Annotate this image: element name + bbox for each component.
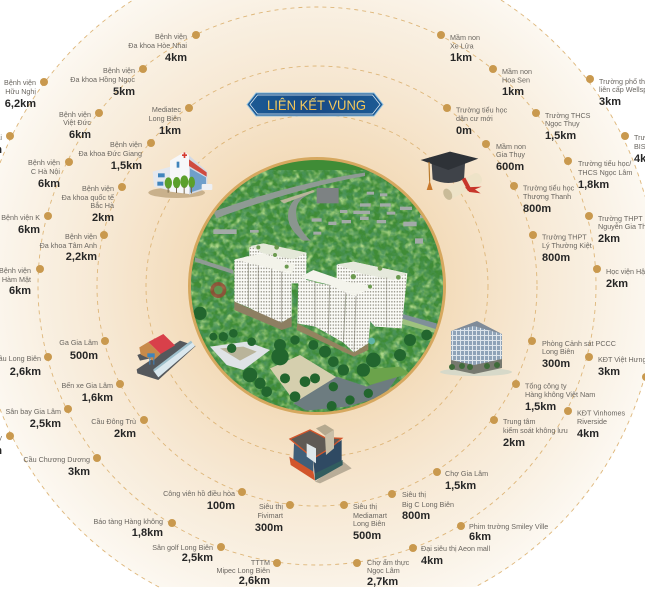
location: Công viên hồ điều hòa: 100m (207, 500, 235, 512)
location: KĐT Việt Hưng (585, 353, 645, 378)
icon: shop building (289, 424, 352, 483)
location: TTTM Mipec Long Biên (216, 558, 281, 587)
location: Đại siêu thị Aeon mall: 4km (421, 555, 443, 567)
location: Đại siêu thị Aeon mall: Đại siêu thị Aeon mall (421, 544, 491, 553)
location: Bệnh viện C Hà Nội (28, 158, 73, 190)
icon: office building (440, 321, 512, 376)
location: Siêu thị Mediamart Long Biên: 500m (353, 530, 381, 542)
location: Bệnh viện Việt Đức: Việt Đức (63, 118, 91, 127)
location: Sân golf Long Biên (152, 543, 225, 564)
location: Tổng công ty Hàng không Việt Nam: 1,5km (525, 401, 556, 413)
location: Bệnh viện Răng Hàm Mặt: 6km (9, 285, 31, 297)
icon: hospital (148, 152, 212, 198)
location: Sân bay Gia Lâm (5, 405, 72, 430)
location: Trường tiểu học dân cư mới: 0m (456, 125, 472, 137)
location: Sân golf Long Biên: Sân golf Long Biên (152, 543, 213, 552)
location: Bệnh viện Đa khoa Đức Giang: Đa khoa Đức Giang (78, 149, 142, 158)
location: Bệnh viện Đa khoa Đức Giang: Bệnh viện (110, 140, 142, 149)
location: Bệnh viện Đa khoa Hồng Ngọc: Đa khoa Hồng Ngọc (70, 75, 135, 84)
location: Phim trường Smiley Ville (457, 522, 548, 543)
location: Trung tâm kiểm soát không lưu: kiểm soát không lưu (503, 426, 568, 435)
location: Phòng Cảnh sát PCCC Long Biên: Phòng Cảnh sát PCCC (542, 339, 616, 348)
towers back right (337, 262, 407, 328)
location: Trường THPT Lý Thường Kiệt: Lý Thường Kiệt (542, 241, 592, 250)
towers front right (297, 278, 315, 327)
location: Bệnh viện Việt Đức: Bệnh viện (59, 110, 91, 119)
location: Trường tiểu học/THCS Ngọc Lâm (564, 157, 632, 191)
location: Trường tiểu học dân cư mới (443, 104, 508, 137)
location: Trường THPT Nguyễn Gia Thiều (585, 212, 645, 245)
towers front left (234, 256, 248, 307)
location: Trung tâm kiểm soát không lưu (490, 416, 568, 449)
location: Báo tàng Hàng không (93, 517, 176, 539)
location: Phòng Cảnh sát PCCC Long Biên (528, 337, 616, 370)
location: clipped hospital at left edge (0, 132, 14, 156)
location: Trường tiểu học Thượng Thanh: 800m (523, 203, 551, 215)
location: KĐT Vinhomes Riverside: Riverside (577, 417, 607, 426)
location: Bệnh viện Đa khoa quốc tế Bắc Hà: Đa khoa quốc tế (62, 193, 114, 202)
location: Bến xe Gia Lâm (61, 380, 124, 404)
location: Trường THCS Ngọc Thụy: Trường THCS (545, 111, 591, 120)
location: Siêu thị Mediamart Long Biên: Mediamart (353, 511, 387, 520)
location: Bệnh viện C Hà Nội: Bệnh viện (28, 158, 60, 167)
location: Trung tâm kiểm soát không lưu: 2km (503, 437, 525, 449)
location: Trường tiểu học/THCS Ngọc Lâm: 1,8km (578, 179, 609, 191)
location: Bệnh viện Đa khoa quốc tế Bắc Hà (62, 183, 126, 224)
location: Công viên hồ điều hòa (163, 488, 246, 512)
location: Báo tàng Hàng không: 1,8km (132, 527, 163, 539)
location: Bệnh viện Đa khoa quốc tế Bắc Hà: Bắc Hà (90, 201, 114, 210)
lower grounds (210, 342, 270, 370)
location: Mầm non Gia Thụy: 600m (496, 161, 524, 173)
location: Siêu thị Fivimart: Fivimart (257, 511, 283, 520)
location: Bệnh viện Đa khoa Tâm Anh: Bệnh viện (65, 232, 97, 241)
location: Mầm non Gia Thụy: Mầm non (496, 142, 526, 151)
location: Bệnh viện Đa khoa Hòe Nhai: Bệnh viện (155, 32, 187, 41)
location: KĐT Vinhomes Riverside: 4km (577, 428, 599, 440)
location: Tổng công ty Hàng không Việt Nam (512, 380, 595, 413)
location: Sân bay Gia Lâm: Sân bay Gia Lâm (5, 407, 61, 416)
location: Trường tiểu học Thượng Thanh: Trường tiểu học (523, 184, 575, 192)
location: Chợ Gia Lâm: 1,5km (445, 480, 476, 492)
location: Siêu thị Fivimart: Siêu thị (259, 502, 283, 511)
location: TTTM Mipec Long Biên: 2,6km (239, 575, 270, 587)
location: KĐT Vinhomes Riverside: KĐT Vinhomes (577, 408, 625, 418)
location: Mầm non Xe Lửa: 1km (450, 52, 472, 64)
location: Tổng công ty Hàng không Việt Nam: Tổng công ty (525, 382, 567, 390)
location: Siêu thị Big C Long Biên (388, 490, 454, 522)
location: Siêu thị Big C Long Biên: 800m (402, 510, 430, 522)
location: Phòng Cảnh sát PCCC Long Biên: Long Biên (542, 347, 574, 356)
location: Bệnh viện K: 6km (18, 224, 40, 236)
location: Cầu Chương Dương: Cầu Chương Dương (23, 455, 90, 464)
location: clipped marker at right edge (642, 373, 645, 381)
location: Ga Gia Lâm: 500m (70, 350, 98, 362)
location: Cầu Long Biên: 2,6km (10, 366, 41, 378)
location: Học viện Hậu cần (593, 265, 645, 290)
location: Cầu Đông Trù: Cầu Đông Trù (91, 417, 136, 426)
location: Trường tiểu học Thượng Thanh (510, 182, 575, 215)
location: Bệnh viện Việt Đức (59, 109, 103, 141)
location: TTTM Mipec Long Biên: Mipec Long Biên (216, 566, 270, 575)
location: Bệnh viện Đa khoa Đức Giang: 1,5km (111, 160, 142, 172)
location: Chợ ẩm thực Ngọc Lâm: Ngọc Lâm (367, 566, 400, 575)
location: Trường tiểu học/THCS Ngọc Lâm: THCS Ngọc Lâm (578, 168, 632, 177)
location: Trường THPT Lý Thường Kiệt: Trường THPT (542, 232, 587, 242)
location: Siêu thị Fivimart (255, 501, 294, 534)
location: Ga Gia Lâm: Ga Gia Lâm (59, 338, 98, 347)
location: Trường THPT Lý Thường Kiệt (529, 231, 592, 264)
location: KĐT Việt Hưng: 3km (598, 366, 620, 378)
location: Trung tâm kiểm soát không lưu: Trung tâm (503, 417, 536, 426)
location: Mầm non Gia Thụy: Gia Thụy (496, 150, 525, 159)
location: Siêu thị Mediamart Long Biên (340, 501, 387, 542)
right schools (437, 31, 645, 290)
location: Học viện Hậu cần: 2km (606, 278, 628, 290)
location: Ga Gia Lâm (59, 337, 109, 362)
location: Bệnh viện Hữu Nghị: Hữu Nghị (5, 87, 36, 96)
location: Trường tiểu học/THCS Ngọc Lâm: Trường tiểu học/ (578, 159, 631, 168)
icon: railway station (137, 334, 196, 380)
location: KĐT Vinhomes Riverside (564, 407, 625, 440)
location: Cầu Long Biên (0, 353, 52, 378)
location: Công viên hồ điều hòa: Công viên hồ điều hòa (163, 489, 235, 498)
location: Chợ ẩm thực Ngọc Lâm (353, 558, 410, 588)
location: Phim trường Smiley Ville: Phim trường Smiley Ville (469, 522, 548, 531)
location: Trường phổ thông liên cấp Wellspring (586, 75, 645, 108)
location: Bệnh viện Đa khoa Hồng Ngọc: Bệnh viện (103, 66, 135, 75)
location: Mầm non Hoa Sen: Hoa Sen (502, 76, 530, 84)
location: Bệnh viện Đa khoa Tâm Anh: Đa khoa Tâm Anh (40, 241, 97, 250)
location: Mầm non Hoa Sen (489, 65, 532, 98)
location: Cầu Chương Dương (23, 454, 101, 478)
location: Chợ Gia Lâm: Chợ Gia Lâm (445, 469, 488, 478)
location: Sân golf Long Biên: 2,5km (182, 552, 213, 564)
location: Trường THPT Nguyễn Gia Thiều: Trường THPT (598, 214, 643, 223)
location: Bệnh viện Đa khoa Hồng Ngọc: 5km (113, 86, 135, 98)
location: Mediatec Long Biên: Long Biên (149, 114, 181, 123)
location: Chợ Gia Lâm (433, 468, 488, 492)
location: Bệnh viện Răng Hàm Mặt (0, 265, 44, 297)
location: Bến xe Gia Lâm: Bến xe Gia Lâm (61, 381, 113, 390)
location: Bệnh viện Đa khoa Tâm Anh: 2,2km (66, 251, 97, 263)
location: Siêu thị Big C Long Biên: Big C Long Biên (402, 500, 454, 509)
location: Bệnh viện Đa khoa Đức Giang (78, 139, 155, 172)
title banner: LIÊN KẾT VÙNG (247, 93, 383, 116)
location: Sân bay Gia Lâm: 2,5km (30, 418, 61, 430)
title banner: LIÊN KẾT VÙNG: LIÊN KẾT VÙNG (267, 97, 366, 113)
location: Mầm non Xe Lửa: Mầm non (450, 33, 480, 42)
location: Trường THPT Nguyễn Gia Thiều: 2km (598, 233, 620, 245)
location: Phim trường Smiley Ville: 6km (469, 531, 491, 543)
location: Bệnh viện Hữu Nghị (4, 78, 48, 110)
location: Bệnh viện K (1, 212, 52, 236)
icon: graduation cap and diploma (421, 152, 484, 202)
location: TTTM Mipec Long Biên: TTTM (251, 558, 270, 567)
location: Cầu Đông Trù: 2km (114, 428, 136, 440)
location: Siêu thị Big C Long Biên: Siêu thị (402, 490, 426, 499)
location: Bệnh viện C Hà Nội: 6km (38, 178, 60, 190)
location: Mầm non Xe Lửa (437, 31, 480, 64)
location: Bệnh viện Đa khoa Tâm Anh (40, 231, 108, 263)
location: Trường THCS Ngọc Thụy (532, 109, 591, 142)
location: Bệnh viện Đa khoa Hòe Nhai: Đa khoa Hòe Nhai (128, 41, 187, 50)
location: Bệnh viện K: Bệnh viện K (1, 213, 40, 222)
location: Bến xe Gia Lâm: 1,6km (82, 392, 113, 404)
location: Bệnh viện Đa khoa Hòe Nhai (128, 31, 200, 64)
location: Trường BIS (621, 132, 645, 165)
location: Trường THCS Ngọc Thụy: Ngọc Thụy (545, 119, 580, 128)
location: Mediatec Long Biên (149, 104, 193, 137)
location: Cầu Chương Dương: 3km (68, 466, 90, 478)
location: Bệnh viện Hữu Nghị: Bệnh viện (4, 78, 36, 87)
location: clipped bridge at left edge (0, 432, 14, 457)
location: Bệnh viện Đa khoa quốc tế Bắc Hà: Bệnh viện (82, 184, 114, 193)
location: Bệnh viện Việt Đức: 6km (69, 129, 91, 141)
location: Cầu Đông Trù (91, 416, 148, 440)
left transport (0, 337, 148, 478)
location: Chợ ẩm thực Ngọc Lâm: Chợ ẩm thực (367, 558, 410, 567)
location: Trường phổ thông liên cấp Wellspring: 3km (599, 96, 621, 108)
location: Bệnh viện Hữu Nghị: 6,2km (5, 98, 36, 110)
central aerial photo (188, 157, 446, 415)
location: Siêu thị Fivimart: 300m (255, 522, 283, 534)
location: Trường THPT Lý Thường Kiệt: 800m (542, 252, 570, 264)
location: Trường tiểu học Thượng Thanh: Thượng Thanh (523, 192, 571, 201)
location: Đại siêu thị Aeon mall (409, 544, 491, 567)
location: Trường tiểu học dân cư mới: dân cư mới (456, 114, 493, 123)
location: Bệnh viện Đa khoa Hòe Nhai: 4km (165, 52, 187, 64)
location: Mầm non Hoa Sen: Mầm non (502, 67, 532, 76)
right offices and residential (490, 337, 645, 449)
location: Trường THCS Ngọc Thụy: 1,5km (545, 130, 576, 142)
left hospitals and services (0, 31, 200, 297)
bottom leisure and shopping (93, 468, 548, 588)
towers back left (249, 243, 307, 283)
location: Bệnh viện C Hà Nội: C Hà Nội (31, 167, 60, 176)
location: Phòng Cảnh sát PCCC Long Biên: 300m (542, 358, 570, 370)
location: Trường tiểu học dân cư mới: Trường tiểu học (456, 106, 508, 114)
location: Siêu thị Mediamart Long Biên: Long Biên (353, 519, 385, 528)
location: Tổng công ty Hàng không Việt Nam: Hàng không Việt Nam (525, 390, 595, 399)
location: Mầm non Hoa Sen: 1km (502, 86, 524, 98)
location: Mầm non Gia Thụy (482, 140, 526, 173)
location: Mediatec Long Biên: 1km (159, 125, 181, 137)
location: Chợ ẩm thực Ngọc Lâm: 2,7km (367, 576, 398, 588)
location: Bệnh viện Đa khoa Hồng Ngọc (70, 65, 147, 98)
location: Mầm non Xe Lửa: Xe Lửa (450, 42, 474, 50)
location: Báo tàng Hàng không: Báo tàng Hàng không (93, 517, 163, 526)
location: Mediatec Long Biên: Mediatec (152, 105, 181, 114)
location: Siêu thị Mediamart Long Biên: Siêu thị (353, 502, 377, 511)
location: Bệnh viện Đa khoa quốc tế Bắc Hà: 2km (92, 212, 114, 224)
